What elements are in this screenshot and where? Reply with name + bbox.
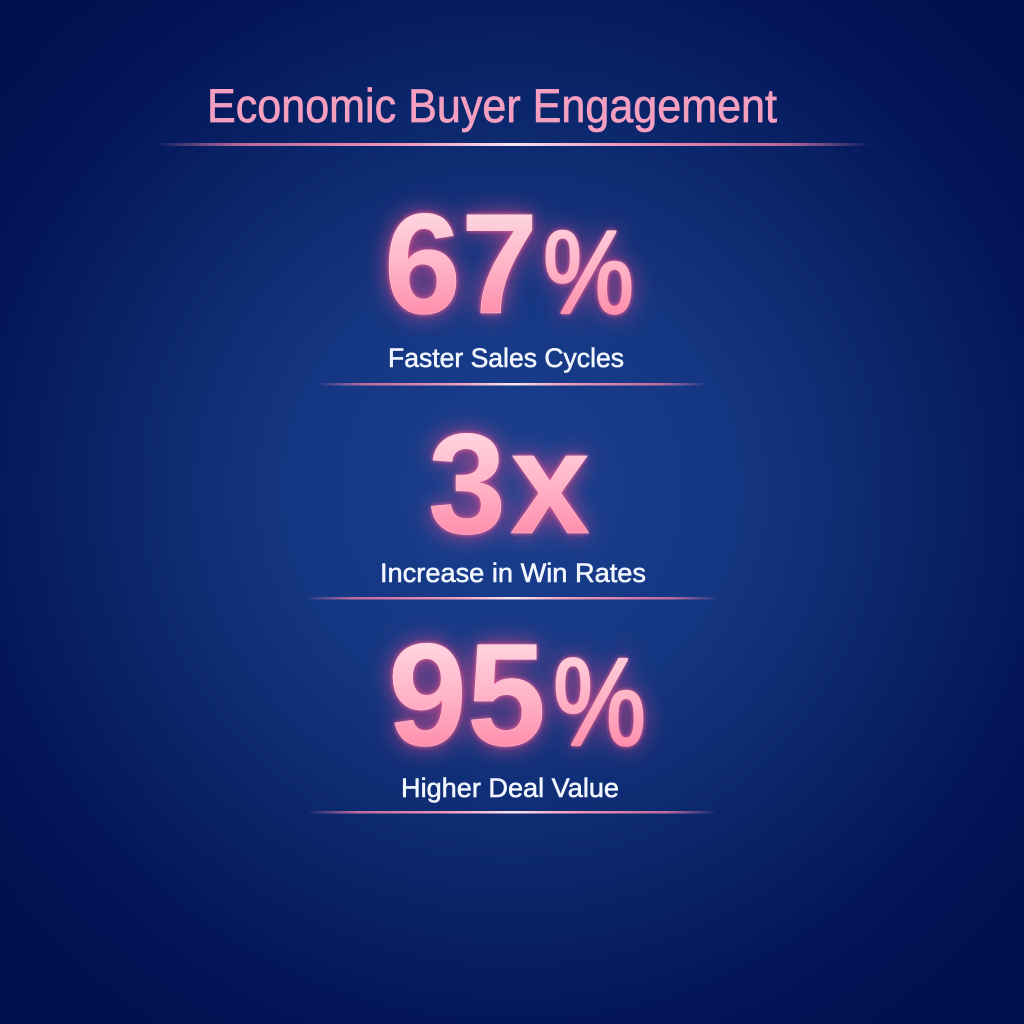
stat: 95%: 95 <box>388 613 546 776</box>
label: increase in win rates: Increase in Win Rates <box>380 558 646 588</box>
label: higher deal value: Higher Deal Value <box>401 773 619 803</box>
divider 3 <box>308 811 716 814</box>
stat: 67% <box>384 185 634 344</box>
stat: 67%: 67 <box>384 185 538 344</box>
stat: 95% <box>388 613 646 776</box>
divider 2 <box>305 597 719 600</box>
stat: 3x: x <box>510 401 590 564</box>
stat: 3x: 3 <box>428 405 506 564</box>
stat: 95%: % <box>553 634 646 772</box>
title: Economic Buyer Engagement <box>207 79 777 132</box>
stat: 3x <box>428 401 590 564</box>
label: faster sales cycles: Faster Sales Cycles <box>388 343 624 373</box>
title divider <box>155 143 870 146</box>
divider 1 <box>318 383 706 386</box>
stat: 67%: % <box>543 207 634 339</box>
